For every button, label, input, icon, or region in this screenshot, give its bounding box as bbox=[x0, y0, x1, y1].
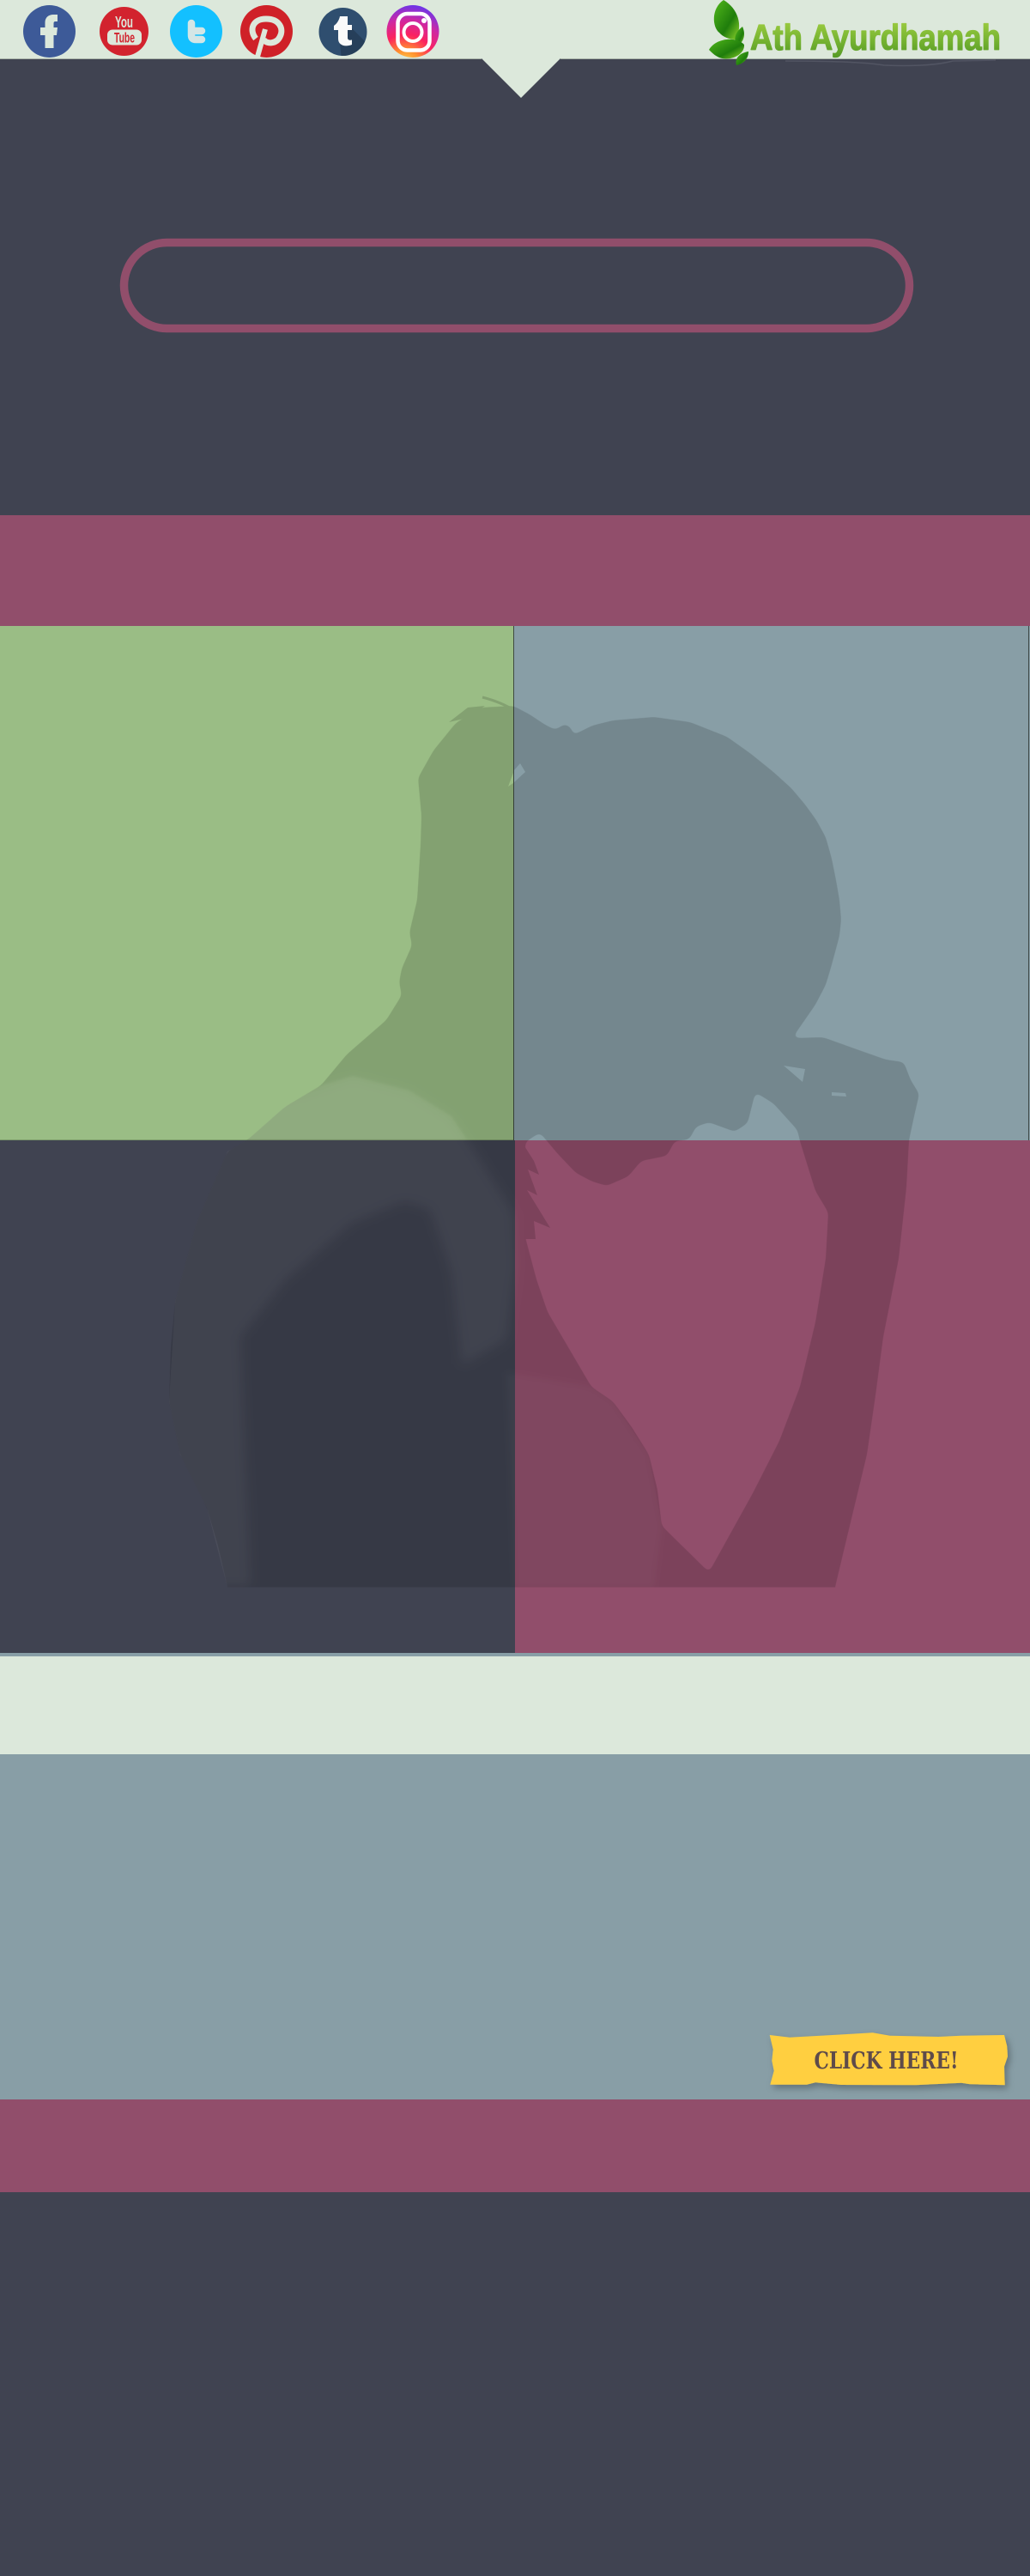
logo: Ath Ayurdhamah: Ath Ayurdhamah bbox=[750, 17, 1001, 58]
panel: light band bbox=[0, 1656, 1030, 1754]
icon: tumblr bbox=[319, 8, 367, 56]
silhouette: woman with head in hand bbox=[129, 697, 919, 1614]
icon: twitter bbox=[170, 5, 222, 58]
quadrant divider lines bbox=[0, 626, 1030, 1140]
panel: teal quadrant bbox=[514, 626, 1028, 1140]
panel: dark quadrant bbox=[0, 1140, 515, 1653]
icon: youtube bbox=[100, 7, 148, 56]
panel: dark footer bbox=[0, 2192, 1030, 2576]
panel: maroon quadrant bbox=[515, 1140, 1030, 1653]
icon: instagram bbox=[386, 5, 439, 58]
icon: pinterest bbox=[240, 5, 293, 58]
panel: maroon band bbox=[0, 515, 1030, 626]
icon: youtube: You bbox=[115, 14, 133, 31]
panel: green quadrant bbox=[0, 626, 513, 1140]
button: click here: CLICK HERE! bbox=[814, 2048, 958, 2075]
button: click here bbox=[770, 2032, 1008, 2085]
panel: maroon footer band bbox=[0, 2099, 1030, 2192]
panel: dark intro background bbox=[0, 59, 1030, 515]
panel: teal section bbox=[0, 1754, 1030, 2099]
title pill outline bbox=[124, 242, 910, 328]
logo: Ath Ayurdhamah bbox=[709, 0, 1001, 65]
panel: header bar with notch bbox=[0, 0, 1030, 98]
stripe below quadrants bbox=[0, 1653, 1030, 1656]
icon: facebook bbox=[23, 5, 76, 58]
icon: youtube: Tube bbox=[114, 29, 135, 46]
